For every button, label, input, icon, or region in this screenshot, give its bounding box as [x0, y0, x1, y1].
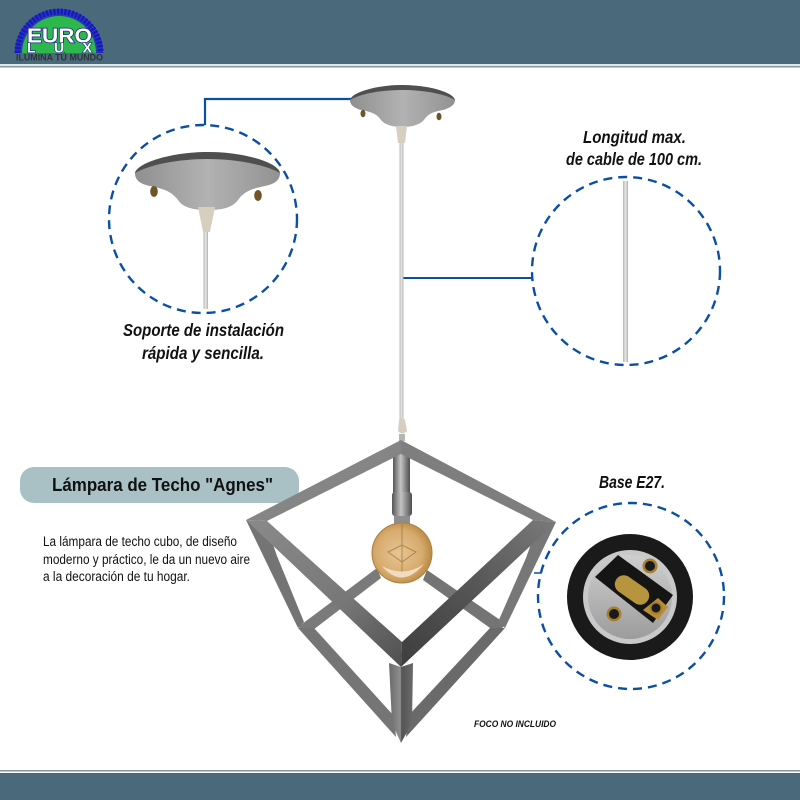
bulb	[372, 523, 432, 583]
top frame	[246, 440, 556, 667]
inset circle: canopy	[109, 125, 297, 313]
title pill: Lámpara de Techo "Agnes"	[52, 475, 273, 495]
contact bar	[595, 555, 673, 623]
cube lamp	[246, 440, 556, 743]
socket body	[567, 534, 693, 660]
terminal holes	[606, 558, 662, 622]
header band	[0, 0, 800, 68]
connector: cable to inset	[403, 277, 533, 279]
logo: Eurolux: LUX	[27, 40, 93, 56]
left and right vertical struts	[246, 520, 556, 628]
note: bulb not included: FOCO NO INCLUIDO	[474, 719, 556, 729]
description text	[43, 534, 250, 584]
description text: a la decoración de tu hogar.	[43, 569, 190, 584]
back lower bars	[298, 568, 506, 633]
inset label: base: Base E27.	[599, 472, 665, 492]
cable plug above cube	[398, 418, 407, 441]
inset label: cable length: de cable de 100 cm.	[566, 149, 702, 169]
cable	[400, 142, 404, 420]
front vertical post	[389, 663, 413, 743]
connector: canopy to inset	[205, 99, 351, 129]
lower frame bars	[298, 628, 505, 737]
logo: Eurolux: EURO	[27, 26, 92, 48]
footer band	[0, 770, 800, 800]
connector: socket to inset	[534, 572, 541, 574]
inset circle: E27 socket	[538, 503, 724, 689]
inset label: canopy: rápida y sencilla.	[142, 343, 264, 363]
title pill	[20, 467, 299, 503]
inset label: canopy: Soporte de instalación	[123, 320, 284, 340]
inset label: canopy	[123, 320, 284, 363]
inset label: cable length: Longitud max.	[583, 127, 686, 147]
inset label: cable length	[566, 127, 702, 169]
brass contact	[611, 572, 668, 620]
bulb socket	[392, 492, 412, 524]
description text: La lámpara de techo cubo, de diseño	[43, 534, 237, 549]
logo: Eurolux: ILUMINA TÚ MUNDO	[16, 52, 103, 64]
back vertical post	[393, 450, 410, 496]
logo: Eurolux	[15, 9, 103, 64]
ceiling canopy	[350, 85, 455, 143]
description text: moderno y práctico, le da un nuevo aire	[43, 552, 250, 567]
inset circle: cable	[532, 177, 720, 365]
